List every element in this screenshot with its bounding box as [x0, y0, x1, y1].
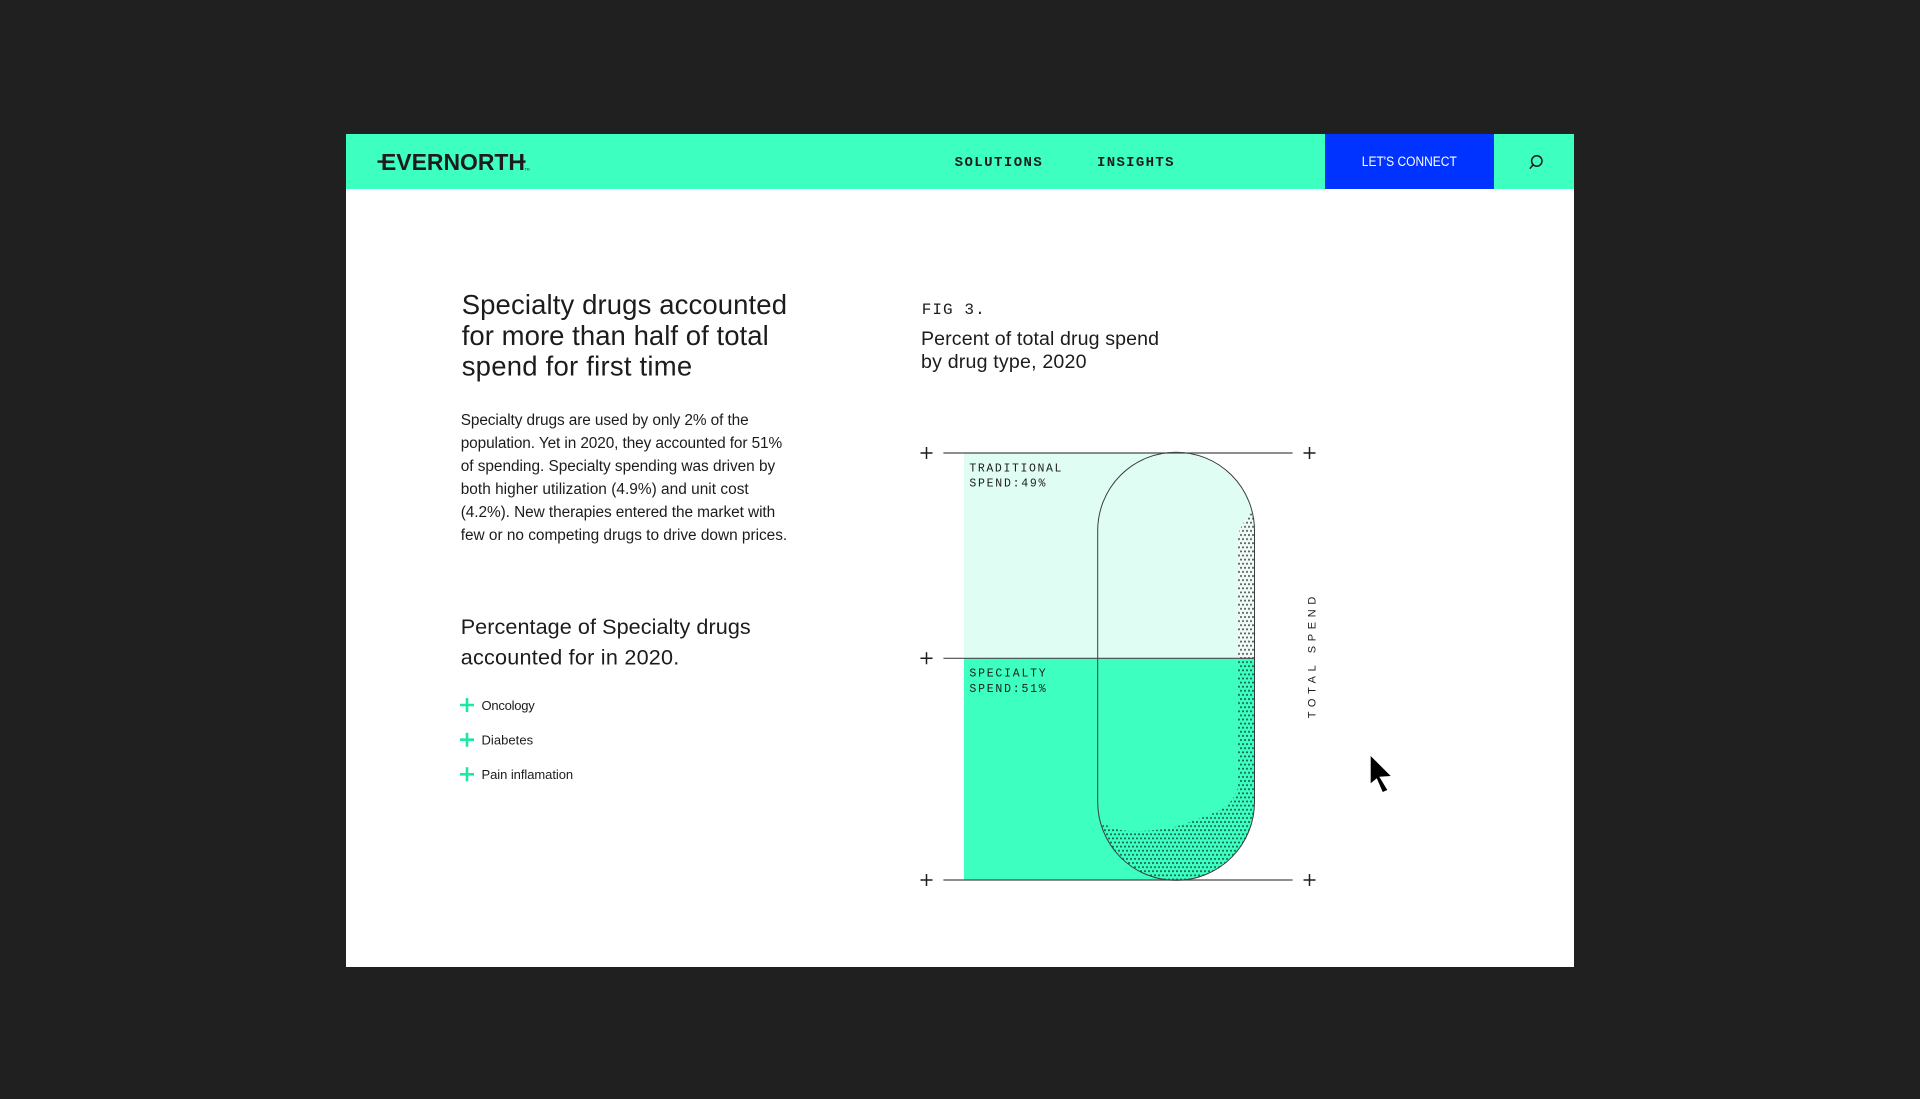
label: specialty spend — [969, 668, 1046, 696]
subheading: percentage of specialty drugs: Percentage of Specialty drugs — [461, 614, 751, 639]
label: traditional spend — [969, 462, 1061, 490]
logo: Evernorth: EVERNORTH — [381, 149, 525, 175]
figure label: FIG 3. — [922, 301, 985, 319]
heading: specialty drugs: spend for first time — [462, 351, 692, 382]
list item: oncology: Oncology — [482, 698, 535, 713]
icon: mouse cursor — [1371, 756, 1391, 792]
label: specialty spend: SPECIALTY — [969, 668, 1046, 680]
body text: of spending. Specialty spending was driven by — [461, 458, 775, 475]
chart title: by drug type, 2020 — [921, 351, 1087, 373]
chart: pill spend split — [920, 447, 1318, 890]
axis label: total spend: TOTAL SPEND — [1306, 597, 1318, 718]
logo: Evernorth: TM — [524, 168, 530, 172]
subheading: percentage of specialty drugs: accounted for in 2020. — [461, 644, 679, 669]
nav link: solutions: SOLUTIONS — [955, 155, 1042, 171]
list item: diabetes: Diabetes — [482, 732, 534, 748]
axis lines — [943, 453, 1293, 880]
body text: both higher utilization (4.9%) and unit cost — [461, 481, 749, 498]
pill shading: stipple — [1102, 512, 1254, 880]
plus markers — [920, 447, 1316, 886]
panel: page card — [346, 134, 1574, 967]
body text: (4.2%). New therapies entered the market with — [461, 504, 775, 521]
label: traditional spend: TRADITIONAL — [969, 462, 1061, 475]
specialty spend area — [964, 658, 1254, 880]
pill outline — [1098, 452, 1254, 880]
navigation bar — [346, 134, 1574, 189]
body text: Specialty drugs are used by only 2% of the — [461, 412, 749, 429]
icon: search — [1530, 156, 1542, 169]
button: let's connect: LET'S CONNECT — [1362, 154, 1457, 169]
list: drug categories — [460, 698, 573, 782]
list item: pain inflamation: Pain inflamation — [482, 767, 573, 782]
heading: specialty drugs — [462, 289, 787, 382]
label: specialty spend: SPEND:51% — [969, 683, 1046, 696]
button: let's connect — [1325, 134, 1494, 189]
chart title: Percent of total drug spend — [921, 328, 1159, 350]
heading: specialty drugs: Specialty drugs accounted — [462, 289, 787, 320]
body text: population. Yet in 2020, they accounted for 51% — [461, 435, 783, 452]
heading: specialty drugs: for more than half of total — [462, 320, 769, 351]
body text — [461, 412, 787, 544]
label: traditional spend: SPEND:49% — [969, 477, 1045, 490]
subheading: percentage of specialty drugs — [461, 614, 751, 669]
chart title — [921, 328, 1159, 373]
nav link: insights: INSIGHTS — [1097, 155, 1174, 171]
traditional spend area — [964, 454, 1252, 658]
body text: few or no competing drugs to drive down prices. — [461, 527, 787, 544]
